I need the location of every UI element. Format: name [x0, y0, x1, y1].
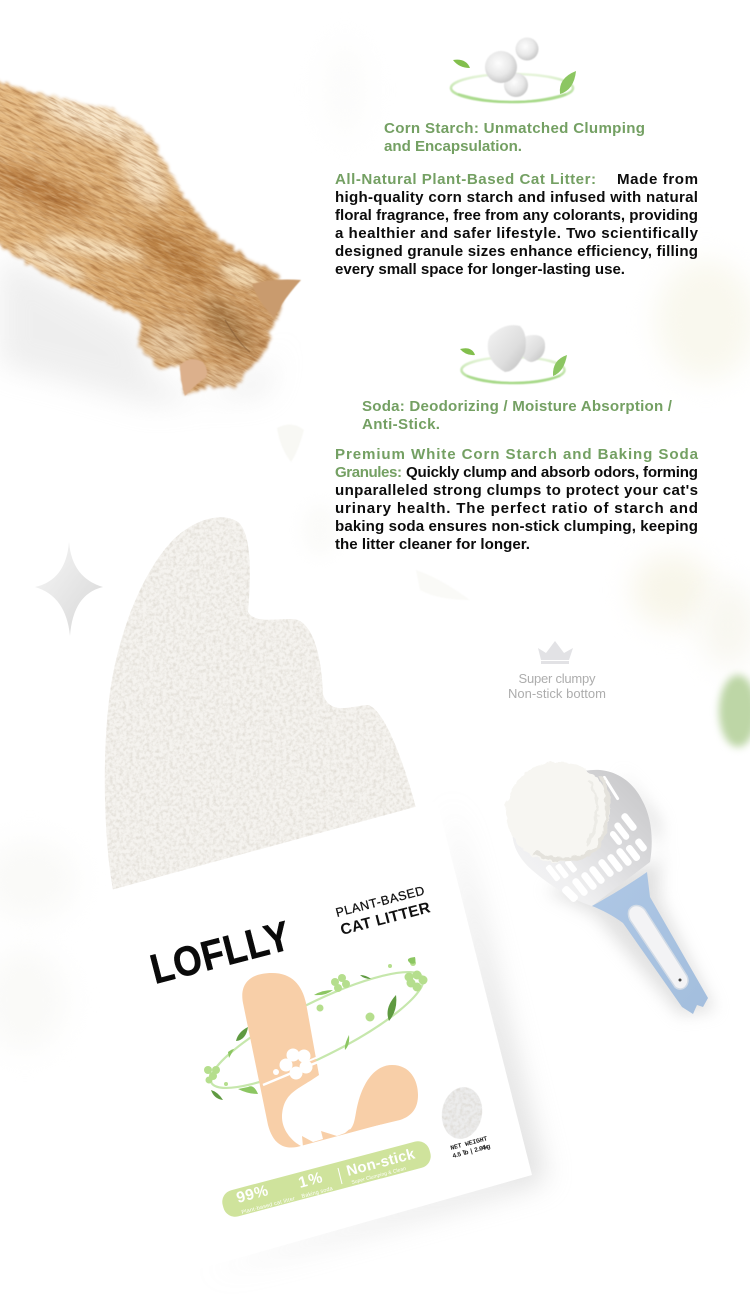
soda body text: the litter cleaner for longer.	[335, 536, 530, 553]
white paw	[282, 1060, 370, 1147]
soda body text: baking soda ensures non-stick clumping, keeping	[335, 518, 698, 535]
scoop slots	[545, 775, 648, 903]
litter pile	[105, 517, 416, 890]
soda icon	[460, 325, 567, 383]
product type	[334, 884, 432, 939]
icon leaves	[453, 60, 576, 94]
product type: CAT LITTER	[339, 899, 432, 939]
icon: sparkle star	[35, 542, 103, 636]
soda body text: Quickly clump and absorb odors, forming	[406, 464, 698, 481]
handle hole	[678, 978, 682, 982]
cat fur markings	[0, 84, 281, 392]
crown caption: Non-stick bottom	[508, 686, 606, 701]
corn starch body text: Made from	[617, 171, 698, 188]
corn starch body text: high-quality corn starch and infused with natural	[335, 189, 698, 206]
paw foot	[345, 1065, 418, 1133]
corn starch icon	[451, 38, 576, 102]
scoop head	[512, 770, 652, 906]
net weight: 4.5 lb | 2.04kg	[452, 1143, 491, 1160]
starch spheres	[485, 38, 538, 97]
cat ear right	[252, 280, 301, 318]
cat shadow	[0, 255, 295, 405]
product type: PLANT-BASED	[334, 884, 426, 920]
corn starch heading: and Encapsulation.	[384, 138, 522, 155]
soda body text: urinary health. The perfect ratio of starch and	[335, 500, 698, 517]
crown badge	[508, 641, 606, 701]
vine wreath	[199, 953, 435, 1107]
soda body text: Premium White Corn Starch and Baking Soda	[335, 446, 699, 463]
background blurred flowers	[0, 40, 750, 1052]
handle insert	[628, 905, 688, 989]
cat ear left	[180, 359, 207, 396]
product bag	[100, 801, 532, 1270]
green claim band: Non-stick	[345, 1145, 417, 1180]
brand name: LOFLLY	[146, 913, 295, 993]
soda body text: Granules:	[335, 464, 402, 481]
corn starch body text: a healthier and safer lifestyle. Two scientifically	[335, 225, 699, 242]
green claim band: Super Clumping & Clean	[351, 1166, 407, 1186]
green claim band: Plant-based cat litter	[241, 1196, 296, 1216]
soda heading	[362, 398, 673, 433]
corn starch body text: every small space for longer-lasting use.	[335, 261, 625, 278]
soda heading: Soda: Deodorizing / Moisture Absorption /	[362, 398, 673, 415]
corn starch body text: floral fragrance, free from any colorants, providing	[335, 207, 698, 224]
scoop shadow	[545, 770, 715, 1015]
cat photo	[0, 79, 302, 396]
green claim band: 1%	[297, 1169, 324, 1192]
green claim band: Baking soda	[301, 1186, 334, 1200]
soda body text: unparalleled strong clumps to protect your cat's	[335, 482, 698, 499]
net weight: NET WEIGHT	[450, 1135, 488, 1152]
vine front and flower	[263, 1048, 318, 1085]
soda clumps	[488, 325, 545, 372]
green claim band	[220, 1139, 433, 1219]
net weight	[450, 1135, 491, 1160]
litter scoop	[506, 762, 708, 1014]
crown caption	[508, 671, 606, 701]
corn starch body text: All-Natural Plant-Based Cat Litter:	[335, 171, 596, 188]
icon leaves	[460, 348, 567, 376]
litter clump	[506, 762, 610, 862]
corn starch body text	[335, 171, 699, 278]
icon: crown	[538, 641, 573, 664]
peach L logo	[242, 973, 418, 1148]
green claim band: 99%	[235, 1182, 270, 1207]
vine leaves and blossoms	[204, 957, 428, 1100]
bag shadow	[205, 800, 545, 1275]
mini litter mark	[438, 1084, 486, 1142]
icon ring	[451, 74, 573, 102]
soda heading: Anti-Stick.	[362, 416, 440, 433]
scoop handle	[592, 872, 708, 1014]
bag body	[100, 801, 532, 1270]
soda body text	[335, 446, 699, 553]
crown caption: Super clumpy	[518, 671, 596, 686]
corn starch heading: Corn Starch: Unmatched Clumping	[384, 120, 645, 137]
icon ring	[462, 357, 564, 383]
corn starch body text: designed granule sizes enhance efficiency, filling	[335, 243, 698, 260]
corn starch heading	[384, 120, 645, 155]
